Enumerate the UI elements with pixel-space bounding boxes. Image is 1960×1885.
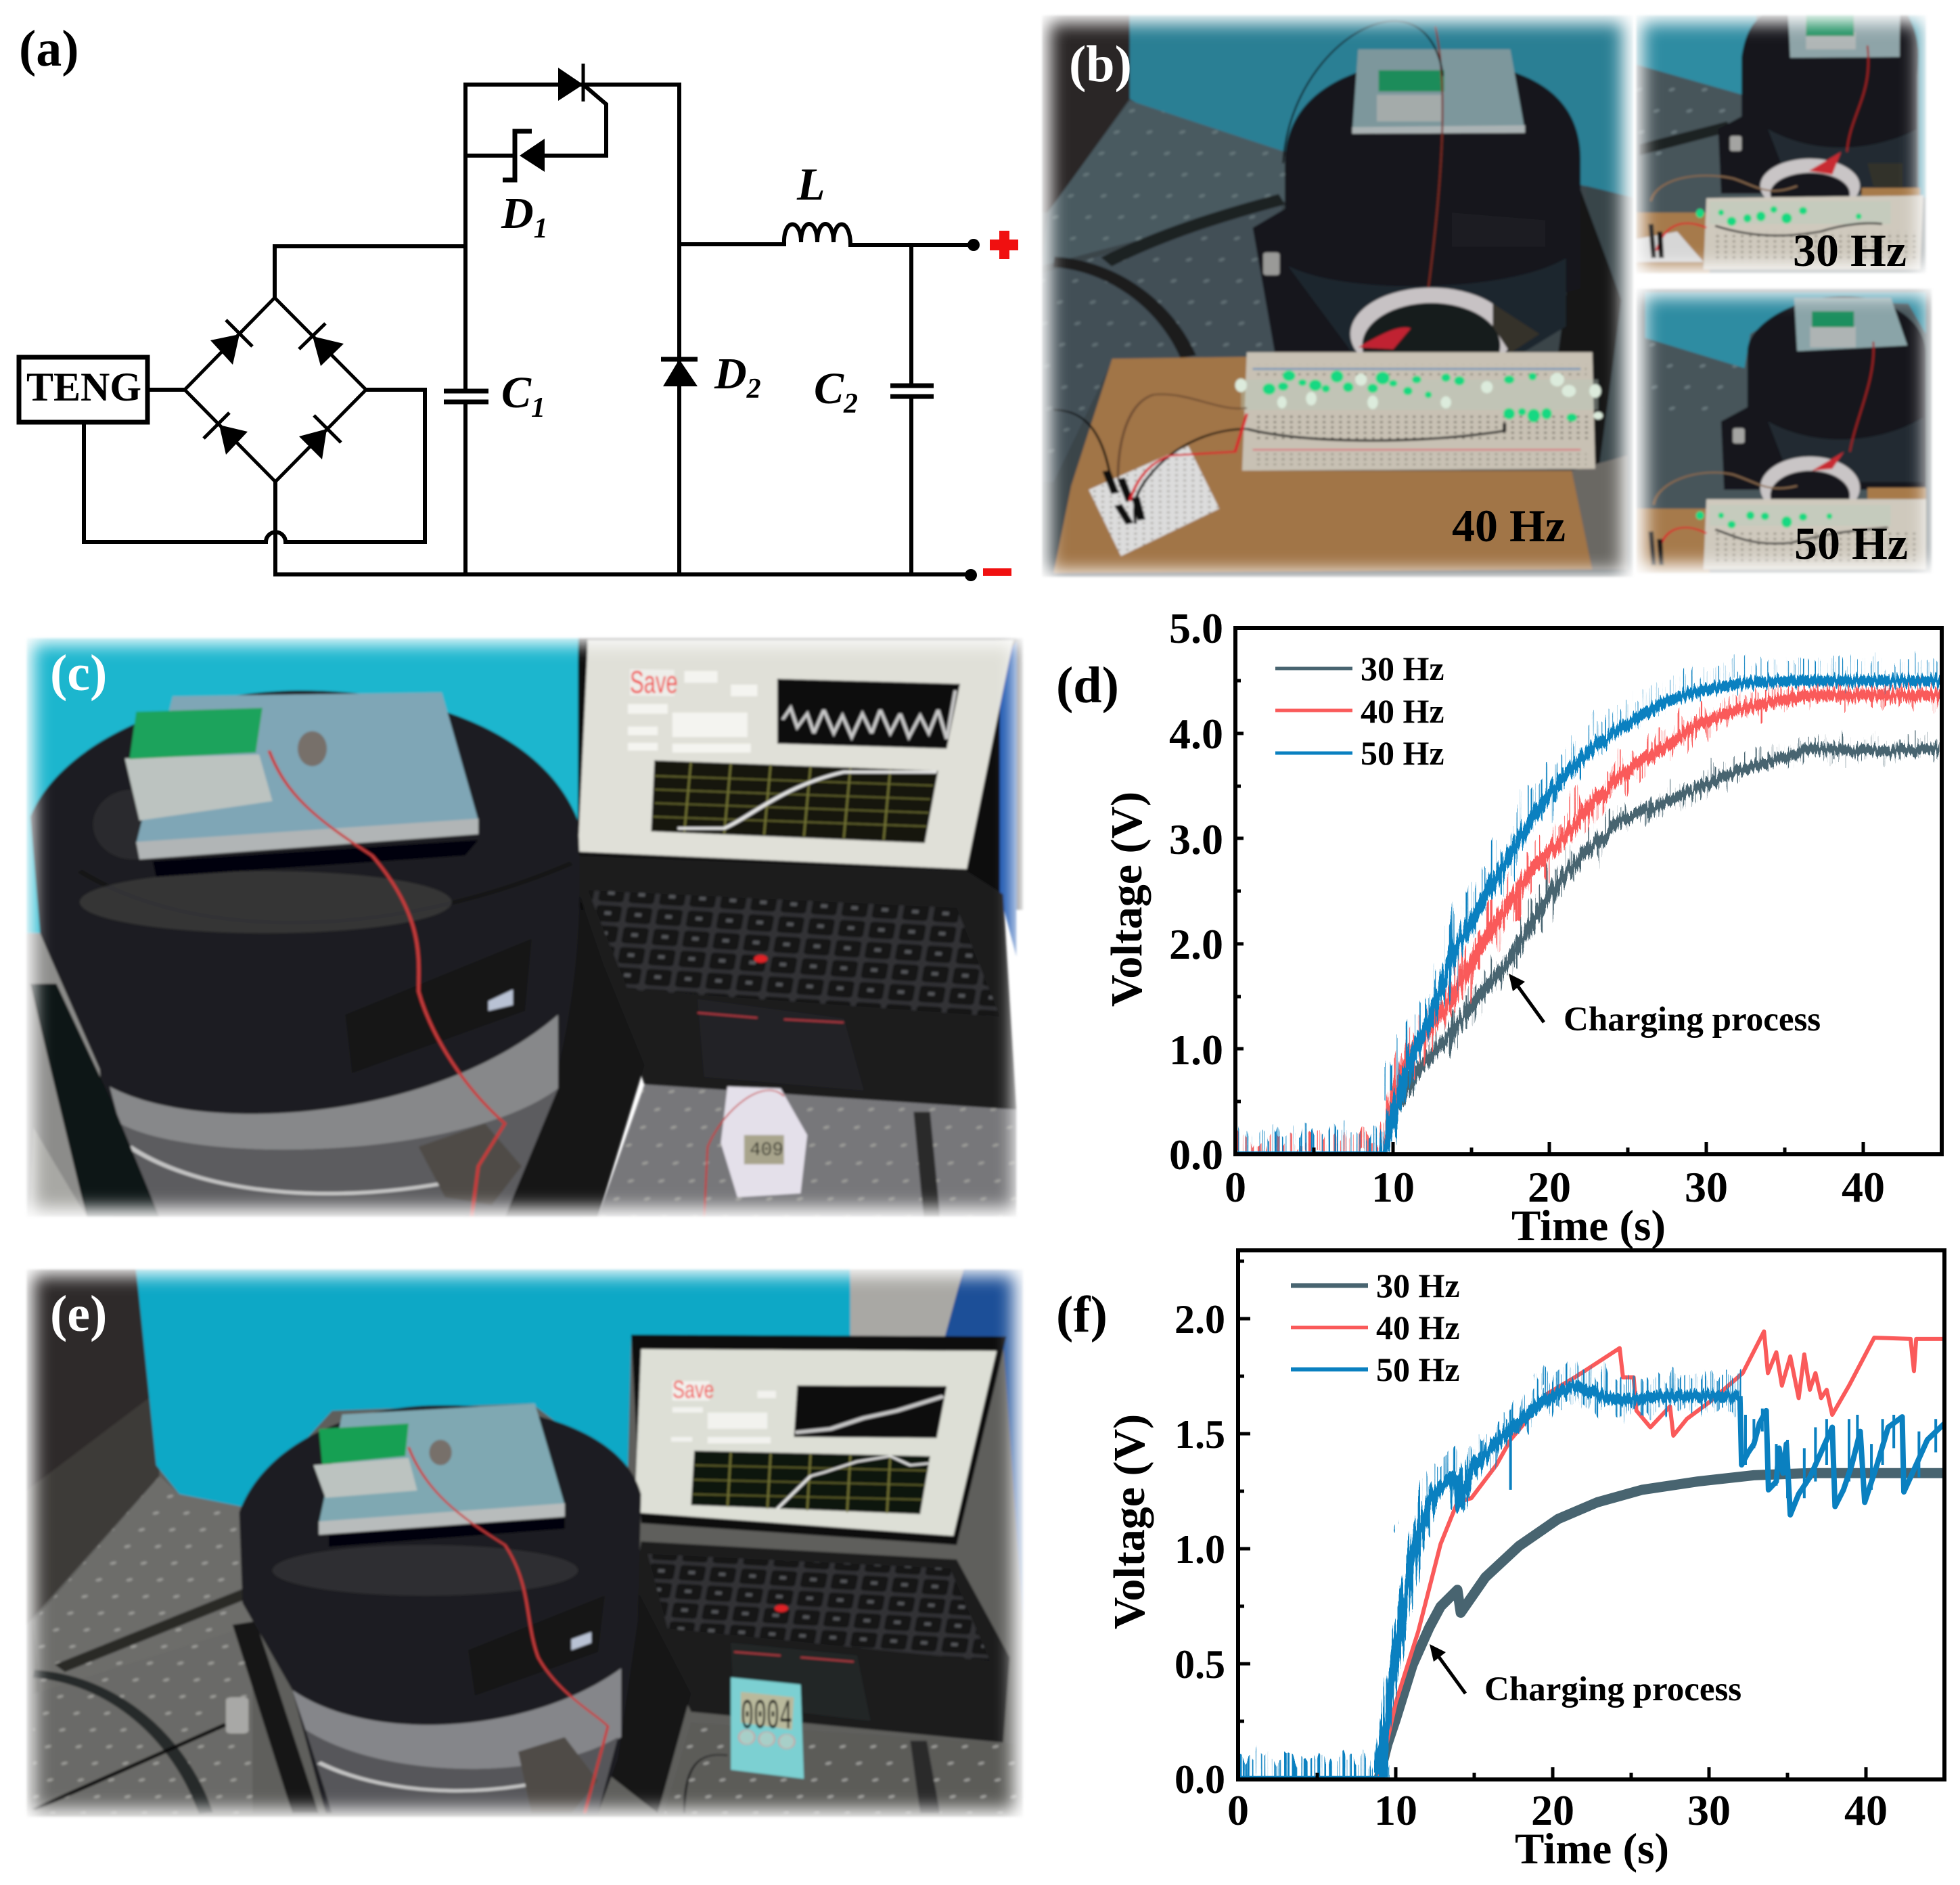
panel label (d): (d): [1056, 657, 1119, 714]
x tick labels f: 20: [1531, 1786, 1574, 1834]
plus sign: [990, 231, 1018, 259]
axes frame d: [1235, 628, 1942, 1154]
diode D2: [661, 359, 698, 386]
trace 50 Hz f: [1238, 1384, 1947, 1778]
y tick labels d: 5.0: [1169, 604, 1223, 652]
TENG source box: TENG: [26, 365, 141, 409]
panel: chart d voltage vs time: [1102, 604, 1942, 1250]
frequency label 50 Hz: 50 Hz: [1794, 518, 1908, 569]
y axis title d: Voltage (V): [1102, 792, 1152, 1007]
x tick labels d: 40: [1842, 1163, 1885, 1211]
trace 30 Hz: [1385, 747, 1941, 1153]
legend d: 50 Hz: [1361, 734, 1444, 772]
y tick labels d: 4.0: [1169, 710, 1223, 758]
label D1: D: [501, 189, 534, 238]
minus sign: [983, 568, 1011, 576]
x tick labels d: 10: [1371, 1163, 1415, 1211]
label L: L: [796, 158, 825, 210]
label D2: D: [714, 349, 747, 399]
legend f: 30 Hz: [1376, 1267, 1460, 1304]
panel label (e): (e): [50, 1286, 107, 1342]
data traces d: [1235, 672, 1941, 1154]
trace 50 Hz: [1235, 672, 1941, 1154]
x tick labels f: 10: [1374, 1786, 1417, 1834]
label D2: 2: [746, 373, 761, 405]
capacitor C2: [890, 386, 934, 396]
arrow d: [1509, 974, 1544, 1022]
axes frame f: [1238, 1250, 1944, 1779]
terminal dots: [965, 239, 980, 581]
Save button text e: Save: [673, 1376, 714, 1403]
x tick labels f: 40: [1844, 1786, 1888, 1834]
legend d: [1275, 650, 1444, 772]
legend f: 40 Hz: [1376, 1309, 1460, 1346]
panel: photo b 30 Hz: [1636, 15, 1926, 273]
x axis title d: Time (s): [1511, 1202, 1666, 1250]
x axis title f: Time (s): [1515, 1825, 1669, 1873]
x tick labels f: 30: [1687, 1786, 1731, 1834]
frequency label 40 Hz: 40 Hz: [1452, 500, 1566, 551]
y tick labels f: 2.0: [1175, 1297, 1225, 1342]
panel: circuit diagram: [19, 64, 1018, 581]
data traces f: [1238, 1332, 1947, 1778]
panel label (a): (a): [19, 20, 79, 77]
x tick labels d: [1225, 1163, 1885, 1211]
diode D1 pair: [503, 64, 583, 180]
trace 40 Hz: [1236, 693, 1941, 1153]
arrow f: [1430, 1644, 1465, 1694]
y tick labels d: 3.0: [1169, 815, 1223, 863]
y tick labels f: 1.0: [1175, 1527, 1225, 1572]
TENG source box: [19, 357, 147, 422]
frequency label 30 Hz: 30 Hz: [1793, 225, 1907, 276]
legend f: [1291, 1267, 1460, 1388]
y tick labels f: 0.5: [1175, 1642, 1225, 1687]
panel: chart f voltage vs time: [1105, 1250, 1947, 1873]
panel label (c): (c): [50, 645, 107, 702]
panel: photo b 50 Hz: [1636, 288, 1932, 573]
x tick labels d: 20: [1528, 1163, 1571, 1211]
label D1: 1: [534, 213, 548, 244]
y tick labels d: 2.0: [1169, 920, 1223, 968]
bridge rectifier diodes: [204, 320, 344, 459]
watch display text: 409: [750, 1140, 783, 1161]
trace 30 Hz f: [1379, 1473, 1947, 1777]
y axis title f: Voltage (V): [1105, 1414, 1154, 1629]
y tick labels d: 1.0: [1169, 1026, 1223, 1074]
x tick labels d: 0: [1225, 1163, 1246, 1211]
trace 40 Hz f: [1379, 1332, 1947, 1777]
label C2: 2: [843, 388, 858, 419]
legend d: 30 Hz: [1361, 650, 1444, 687]
annotation f: Charging process: [1484, 1671, 1741, 1708]
panel: photo e shaker, laptop and timer: [26, 1269, 1023, 1817]
inductor L: [784, 224, 850, 245]
y tick labels d: 0.0: [1169, 1131, 1223, 1179]
panel label (b): (b): [1069, 36, 1132, 93]
x tick labels d: 30: [1685, 1163, 1728, 1211]
panel: photo b 40 Hz: [1042, 15, 1633, 577]
y tick labels f: [1175, 1297, 1225, 1802]
Save button text: Save: [630, 665, 678, 700]
legend f: 50 Hz: [1376, 1350, 1460, 1388]
annotation d: Charging process: [1564, 1001, 1821, 1039]
capacitor C1: [444, 391, 488, 402]
x tick labels f: [1227, 1786, 1888, 1834]
label C2: C: [814, 364, 844, 413]
label C1: 1: [531, 392, 545, 424]
timer display: 0004: [741, 1693, 792, 1741]
panel label (f): (f): [1056, 1286, 1108, 1343]
legend d: 40 Hz: [1361, 692, 1444, 730]
panel: photo c shaker and laptop: [26, 638, 1023, 1217]
ticks d: [1235, 681, 1863, 1154]
y tick labels d: [1169, 604, 1223, 1179]
ticks f: [1238, 1261, 1866, 1779]
label C1: C: [501, 368, 531, 417]
x tick labels f: 0: [1227, 1786, 1249, 1834]
y tick labels f: 1.5: [1175, 1412, 1225, 1457]
y tick labels f: 0.0: [1175, 1757, 1225, 1802]
wiring: [84, 85, 974, 574]
